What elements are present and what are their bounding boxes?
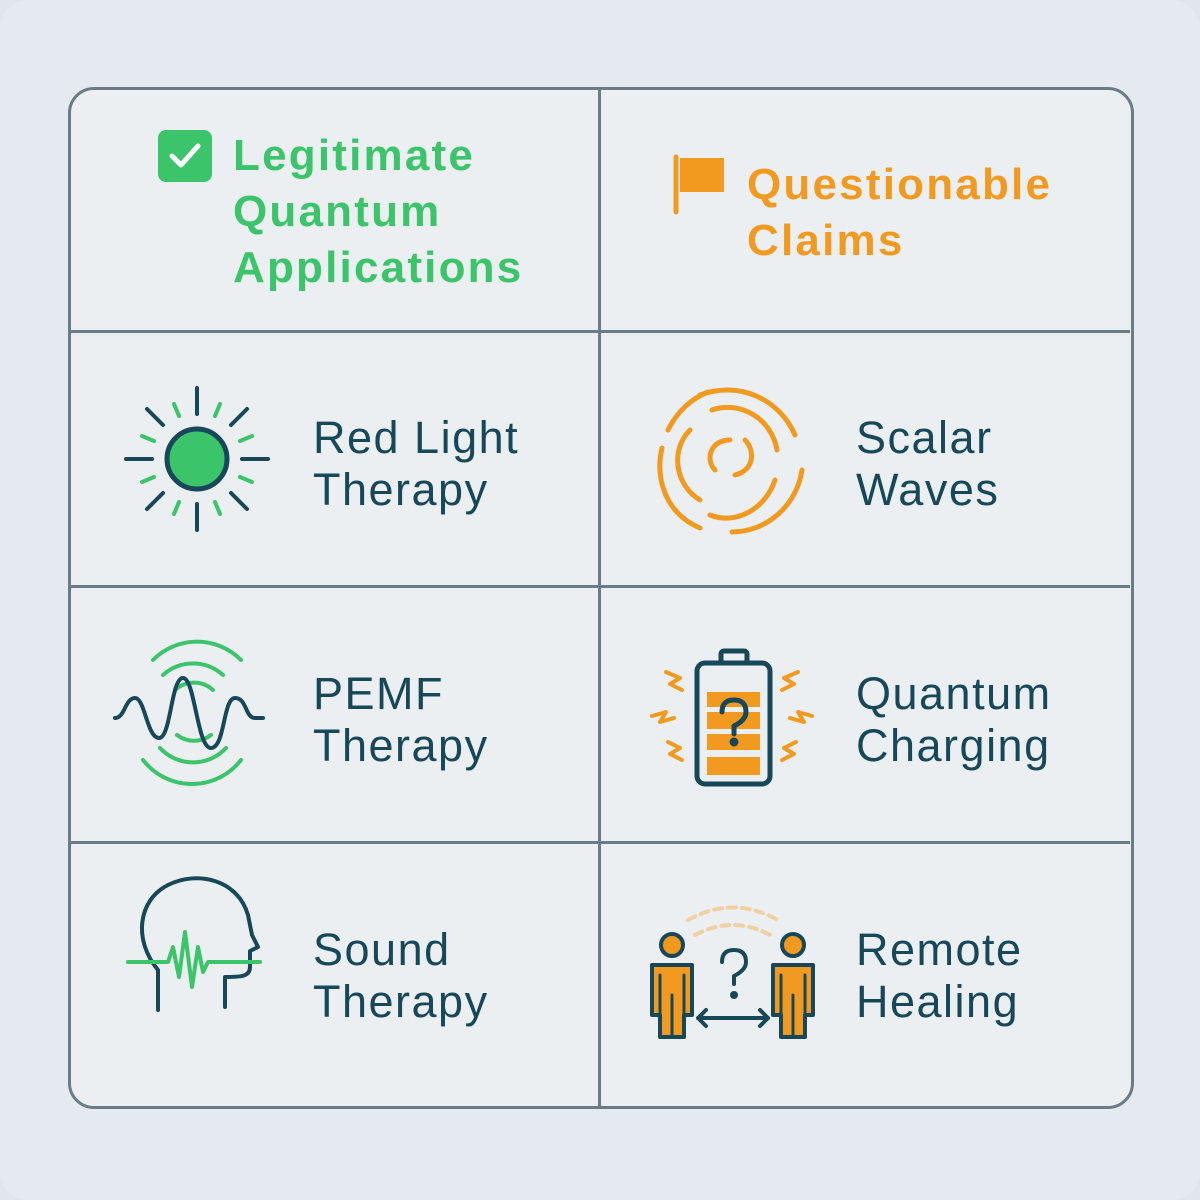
table frame — [68, 87, 1134, 1109]
heading: legitimate: Quantum — [233, 187, 442, 236]
label: scalar — [856, 412, 999, 515]
label: sound: Therapy — [313, 976, 489, 1027]
label: remote — [856, 924, 1023, 1027]
icon: pemf — [115, 642, 263, 784]
heading: questionable — [747, 160, 1052, 265]
label: scalar: Waves — [856, 464, 999, 515]
icon: check — [158, 130, 212, 182]
label: red light: Therapy — [313, 464, 489, 515]
label: remote: Remote — [856, 924, 1023, 975]
label: quantum charging: Quantum — [856, 668, 1052, 719]
label: quantum charging — [856, 668, 1052, 771]
label: scalar: Scalar — [856, 412, 993, 463]
label: quantum charging: Charging — [856, 720, 1051, 771]
icon: head — [128, 878, 260, 1010]
label: sound — [313, 924, 489, 1027]
icon: people — [652, 908, 813, 1037]
heading: questionable: Claims — [747, 216, 904, 265]
icon: flag — [676, 157, 724, 212]
label: pemf: Therapy — [313, 720, 489, 771]
label: pemf: PEMF — [313, 668, 444, 719]
heading: questionable: Questionable — [747, 160, 1052, 209]
icon: battery — [652, 651, 812, 784]
label: remote: Healing — [856, 976, 1019, 1027]
icon: spiral — [660, 390, 802, 532]
icon: sun — [126, 388, 268, 530]
heading: legitimate: Legitimate — [233, 131, 475, 180]
label: red light — [313, 412, 519, 515]
label: pemf — [313, 668, 489, 771]
heading: legitimate — [233, 131, 523, 292]
heading: legitimate: Applications — [233, 243, 523, 292]
label: red light: Red Light — [313, 412, 519, 463]
label: sound: Sound — [313, 924, 451, 975]
